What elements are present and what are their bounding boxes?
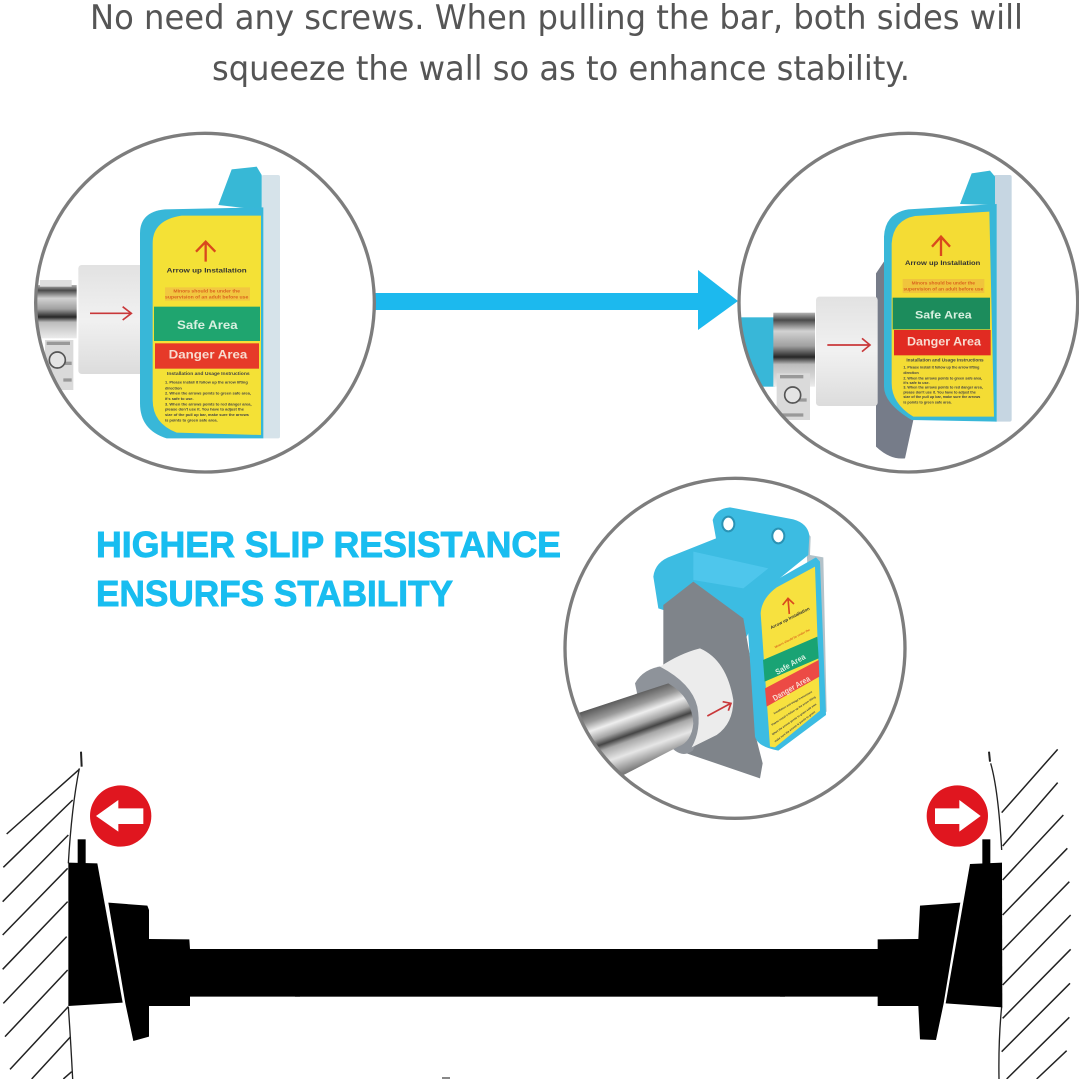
icon: white sleeve with red arrow [816,297,878,406]
icon: left wall with hatching [3,752,82,1079]
icon: blue front plate [747,557,826,751]
panel: yellow warning label: it's safe to use. [165,396,194,401]
panel: yellow warning label: Arrow up Installation [905,261,981,267]
panel: detail circle before pulling [35,133,374,472]
panel: yellow warning label: direction [903,371,919,375]
icon: blue bracket body [140,207,263,438]
icon: metal pole end [35,280,77,390]
heading: ENSURFS STABILITY [96,573,453,614]
title: squeeze the wall so as to enhance stability. [212,49,910,89]
panel: yellow warning label: make sure the arrows is points to green [773,710,816,743]
panel: yellow warning label: 3. When the arrows points to red danger area, [903,386,983,390]
icon: blue bracket with mounting tab [653,507,827,717]
panel: yellow warning label: supervision of an adult before use [165,295,249,300]
panel: yellow warning label: 3. When the arrows points to red danger area, [165,401,252,406]
panel: yellow warning label: Minors should be under the [774,628,811,649]
icon: white sleeve with red arrow [660,648,733,747]
panel: yellow warning label: Danger Area [169,348,247,362]
icon: grey pressure plate [876,260,913,459]
chart: pull-up bar cross-section diagram [3,749,1071,1079]
panel: yellow warning label: 1. Please install it follow up the arrow lifting [903,365,979,369]
icon: red right arrow [927,785,988,847]
panel: yellow warning label [153,216,261,435]
arrow: from first detail to second detail [374,270,738,330]
title [90,0,1023,89]
panel: yellow warning label: Arrow up Installation [770,606,811,630]
panel: yellow warning label: Installation and Usage Instructions [167,371,250,376]
panel: yellow warning label: direction [165,385,182,390]
panel: yellow warning label: Danger Area [907,335,982,348]
icon: right bracket and bar end [780,839,1002,1040]
panel: yellow warning label: Arrow up Installation [167,268,247,275]
panel: yellow warning label: When the arrows points to green safe area [771,702,818,736]
icon: blue bracket body [884,204,997,422]
panel: yellow warning label: Minors should be under the [173,288,241,293]
panel: yellow warning label: is points to green safe area. [165,417,218,422]
heading [96,524,561,614]
heading: HIGHER SLIP RESISTANCE [96,524,561,565]
panel: yellow warning label: Minors should be under the [912,280,976,285]
panel: detail circle angled view [560,478,905,818]
icon: red left arrow [90,785,151,847]
panel: yellow warning label [761,567,820,747]
panel: yellow warning label: Safe Area [915,309,973,321]
icon: blue strap [741,317,775,387]
icon: metal collar [773,313,815,420]
panel: yellow warning label: please don't use it. You have to adjust the [165,407,245,412]
panel: detail circle after pulling [737,133,1078,472]
icon: right wall with hatching [989,749,1071,1079]
icon: left bracket and bar end [68,839,300,1041]
panel: yellow warning label: Safe Area [177,319,238,332]
panel: yellow warning label: size of the pull up bar, make sure the arrows [903,395,980,399]
panel: yellow warning label: Safe Area [774,652,808,677]
panel: yellow warning label: 2. When the arrows points to green safe area, [165,391,251,396]
panel: yellow warning label: 1. Please install it follow up the arrow lifting [165,379,248,384]
icon: bracket back plate and tab [218,167,280,438]
panel: yellow warning label: Please install it follow up the arrow lifting [770,695,817,727]
icon: chrome pole [580,683,694,775]
panel: yellow warning label: Installation and Usage Instructions [906,358,984,363]
panel: yellow warning label: please don't use it. You have to adjust the [903,390,976,394]
icon: grey mount block [663,582,763,778]
panel: yellow warning label: supervision of an adult before use [903,286,984,291]
panel: yellow warning label: Installation and Usage Instructions [773,689,813,715]
icon: back plate and tab [960,171,1012,422]
panel: yellow warning label: Danger Area [771,674,812,703]
panel: yellow warning label: size of the pull up bar, make sure the arrows [165,412,250,417]
icon: grey collar [635,666,700,754]
panel: yellow warning label [892,212,994,417]
panel: yellow warning label: 2. When the arrows points to green safe area, [903,376,982,380]
icon: white sleeve with red arrow [78,265,143,374]
panel: yellow warning label: it's safe to use. [903,381,930,385]
bar [295,949,785,997]
panel: yellow warning label: is points to green safe area. [903,400,952,404]
